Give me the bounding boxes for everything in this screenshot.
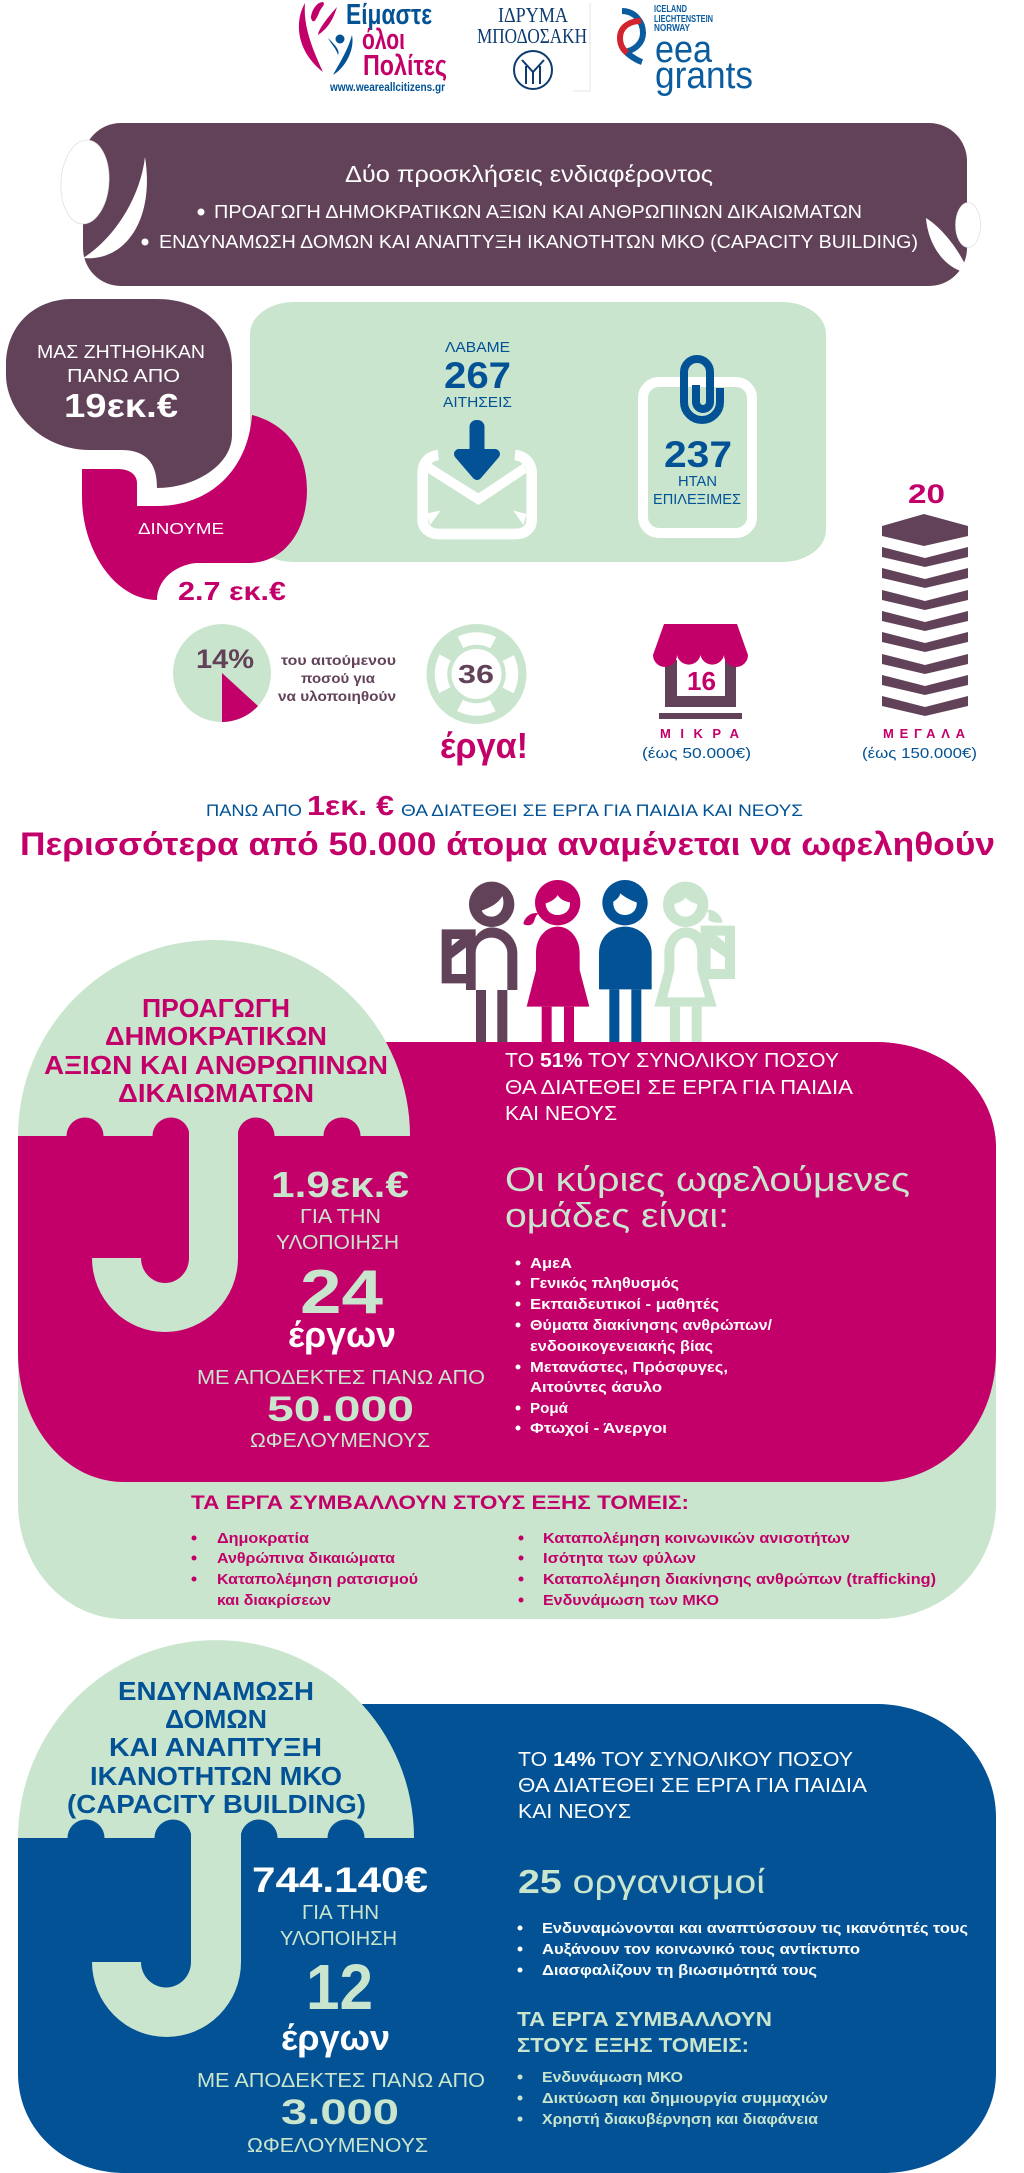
text: share of requested amount: του αιτούμενου: [281, 652, 396, 668]
panel: requested purple bubble: [6, 299, 232, 488]
stat: 237 eligible: ΗΤΑΝ: [678, 473, 717, 490]
panel: democratic values section: [18, 940, 996, 1619]
icon: large projects stack: 20: [908, 479, 945, 509]
list: sectors left column: Δημοκρατία: [217, 1531, 309, 1547]
text: 51 percent for children: [505, 1050, 854, 1125]
stat: 237 eligible: [653, 434, 741, 508]
logo: Είμαστε όλοι Πολίτες: όλοι: [362, 24, 405, 56]
text: over 1 million for children: ΠΑΝΩ ΑΠΟ: [206, 801, 302, 820]
icon: four children figures: [442, 880, 735, 1043]
list: capacity sectors: [518, 2070, 828, 2128]
text: 51 percent for children: ΘΑ ΔΙΑΤΕΘΕΙ ΣΕ ΕΡΓΑ ΓΙΑ ΠΑΙΔΙΑ: [505, 1077, 854, 1099]
icon: small projects shop: 16: [687, 666, 716, 696]
list: beneficiary groups: Γενικός πληθυσμός: [530, 1276, 679, 1292]
heading: sectors: [517, 2009, 772, 2057]
list: sectors left column: [192, 1531, 418, 1609]
stats: budget and projects: ΩΦΕΛΟΥΜΕΝΟΥΣ: [250, 1430, 430, 1452]
logo: EEA grants: LIECHTENSTEIN: [654, 14, 713, 25]
list: beneficiary groups: Εκπαιδευτικοί - μαθητές: [530, 1297, 719, 1313]
logo: EEA grants: [620, 4, 753, 97]
stat: 237 eligible: ΕΠΙΛΕΞΙΜΕΣ: [653, 491, 741, 508]
list: organisation benefits: [518, 1921, 968, 1979]
figure: boy with backpack: [442, 882, 517, 1043]
icon: document with paperclip: [643, 359, 752, 533]
panel: requested purple bubble: ΜΑΣ ΖΗΤΗΘΗΚΑΝ: [37, 341, 205, 362]
list: sectors left column: και διακρίσεων: [217, 1593, 331, 1609]
text: 14 percent for children: ΤΟ 14% ΤΟΥ ΣΥΝΟΛΙΚΟΥ ΠΟΣΟΥ: [518, 1749, 853, 1771]
stats: budget and projects: 24: [300, 1258, 384, 1327]
stats: budget and projects: ΓΙΑ ΤΗΝ: [300, 1206, 381, 1228]
list: sectors right column: [518, 1531, 936, 1609]
heading: promotion of democratic values: ΔΙΚΑΙΩΜΑΤΩΝ: [118, 1078, 314, 1108]
logo: Ίδρυμα Μποδοσάκη: [477, 3, 590, 91]
logo: Είμαστε όλοι Πολίτες: Πολίτες: [363, 50, 447, 82]
text: over 1 million for children: ΘΑ ΔΙΑΤΕΘΕΙ ΣΕ ΕΡΓΑ ΓΙΑ ΠΑΙΔΙΑ ΚΑΙ ΝΕΟΥΣ: [401, 801, 803, 820]
text: 14 percent for children: ΚΑΙ ΝΕΟΥΣ: [518, 1801, 631, 1823]
icon: umbrella: [18, 1640, 414, 2037]
text: share of requested amount: να υλοποιηθούν: [278, 688, 396, 704]
figure: boy in blue: [599, 880, 652, 1043]
panel: two calls banner: Δύο προσκλήσεις ενδιαφέροντος: [345, 161, 713, 187]
stats: budget and projects: 3.000: [281, 2093, 399, 2132]
stats: budget and projects: έργων: [281, 2017, 390, 2058]
stat: 267 applications: ΑΙΤΗΣΕΙΣ: [443, 394, 512, 411]
stats: budget and projects: ΥΛΟΠΟΙΗΣΗ: [280, 1928, 397, 1950]
panel: we give pink bubble: ΔΙΝΟΥΜΕ: [138, 521, 224, 538]
icon: large projects stack: ΜΕΓΑΛΑ: [883, 726, 966, 741]
list: beneficiary groups: ΑμεΑ: [530, 1256, 573, 1272]
text: 51 percent for children: ΤΟ 51% ΤΟΥ ΣΥΝΟΛΙΚΟΥ ΠΟΣΟΥ: [505, 1050, 839, 1072]
icon: envelope with arrow: [423, 420, 532, 534]
heading: 25 organisations: 25 οργανισμοί: [518, 1863, 765, 1900]
icon: lifebuoy with 36 projects: [426, 624, 528, 766]
text: share of requested amount: [278, 652, 396, 704]
list: sectors left column: Ανθρώπινα δικαιώματα: [217, 1551, 395, 1567]
icon: large projects stack: [862, 479, 977, 762]
panel: capacity building section: [18, 1640, 996, 2173]
list: organisation benefits: Διασφαλίζουν τη βιωσιμότητά τους: [542, 1963, 817, 1979]
logo: Ίδρυμα Μποδοσάκη: ΙΔΡΥΜΑ: [498, 3, 569, 27]
icon: small projects shop: [642, 624, 751, 762]
panel: applications green box: [250, 302, 826, 562]
logo: EEA grants: ICELAND: [654, 4, 687, 15]
list: beneficiary groups: Αιτούντες άσυλο: [530, 1380, 662, 1396]
figure: girl with backpack: [654, 882, 735, 1043]
heading: sectors: ΣΤΟΥΣ ΕΞΗΣ ΤΟΜΕΙΣ:: [517, 2035, 749, 2057]
icon: lifebuoy with 36 projects: έργα!: [440, 725, 528, 766]
list: sectors left column: Καταπολέμηση ρατσισμού: [217, 1572, 418, 1588]
stats: budget and projects: [197, 1861, 485, 2157]
list: organisation benefits: Ενδυναμώνονται και αναπτύσσουν τις ικανότητές τους: [542, 1921, 968, 1937]
heading: main beneficiary groups: Οι κύριες ωφελούμενες: [505, 1161, 910, 1199]
stat: 267 applications: ΛΑΒΑΜΕ: [445, 339, 510, 356]
panel: two calls banner: ΕΝΔΥΝΑΜΩΣΗ ΔΟΜΩΝ ΚΑΙ ΑΝΑΠΤΥΞΗ ΙΚΑΝΟΤΗΤΩΝ ΜΚΟ (CAPACITY BUILDING): [159, 231, 918, 252]
icon: large projects stack: (έως 150.000€): [862, 745, 977, 762]
panel: two calls banner: ΠΡΟΑΓΩΓΗ ΔΗΜΟΚΡΑΤΙΚΩΝ ΑΞΙΩΝ ΚΑΙ ΑΝΘΡΩΠΙΝΩΝ ΔΙΚΑΙΩΜΑΤΩΝ: [214, 201, 862, 222]
list: capacity sectors: Δικτύωση και δημιουργία συμμαχιών: [542, 2091, 828, 2107]
heading: capacity building: ΙΚΑΝΟΤΗΤΩΝ ΜΚΟ: [90, 1761, 342, 1791]
panel: requested purple bubble: ΠΑΝΩ ΑΠΟ: [67, 365, 180, 386]
stat: 237 eligible: 237: [664, 434, 732, 475]
heading: capacity building: ΚΑΙ ΑΝΑΠΤΥΞΗ: [109, 1732, 322, 1762]
logo: EEA grants: eea: [655, 29, 713, 71]
stats: budget and projects: ΩΦΕΛΟΥΜΕΝΟΥΣ: [247, 2135, 428, 2157]
chart: 14 percent pie: 14%: [196, 644, 254, 674]
heading: promotion of democratic values: ΑΞΙΩΝ ΚΑΙ ΑΝΘΡΩΠΙΝΩΝ: [44, 1050, 388, 1080]
list: capacity sectors: Ενδυνάμωση ΜΚΟ: [542, 2070, 683, 2086]
heading: sectors: ΤΑ ΕΡΓΑ ΣΥΜΒΑΛΛΟΥΝ: [517, 2009, 772, 2031]
stat: 267 applications: [443, 339, 512, 411]
panel: we give pink bubble: 2.7 εκ.€: [178, 576, 286, 606]
list: sectors right column: Ενδυνάμωση των ΜΚΟ: [543, 1593, 719, 1609]
panel: two calls banner: [58, 123, 981, 286]
list: beneficiary groups: Μετανάστες, Πρόσφυγες,: [530, 1360, 728, 1376]
list: beneficiary groups: ενδοοικογενειακής βίας: [530, 1339, 713, 1355]
heading: promotion of democratic values: ΠΡΟΑΓΩΓΗ: [142, 993, 290, 1023]
heading: more than 50000 beneficiaries: Περισσότερα από 50.000 άτομα αναμένεται να ωφεληθούν: [20, 826, 995, 862]
heading: main beneficiary groups: [505, 1161, 910, 1235]
list: organisation benefits: Αυξάνουν τον κοινωνικό τους αντίκτυπο: [542, 1942, 860, 1958]
stats: budget and projects: 1.9εκ.€: [271, 1164, 409, 1205]
heading: capacity building: [67, 1676, 366, 1819]
chart: 14 percent pie: [173, 624, 271, 722]
stats: budget and projects: ΓΙΑ ΤΗΝ: [302, 1902, 379, 1924]
list: sectors right column: Ισότητα των φύλων: [543, 1551, 696, 1567]
icon: umbrella: [18, 940, 410, 1332]
stats: budget and projects: 12: [306, 1951, 373, 2023]
heading: sectors: ΤΑ ΕΡΓΑ ΣΥΜΒΑΛΛΟΥΝ ΣΤΟΥΣ ΕΞΗΣ ΤΟΜΕΙΣ:: [191, 1492, 689, 1514]
list: sectors right column: Καταπολέμηση κοινωνικών ανισοτήτων: [543, 1531, 850, 1547]
panel: we give pink bubble: [82, 415, 307, 606]
text: over 1 million for children: 1εκ. €: [307, 790, 394, 821]
heading: capacity building: ΔΟΜΩΝ: [165, 1704, 267, 1734]
logo: Είμαστε όλοι Πολίτες: [299, 0, 447, 94]
list: beneficiary groups: Φτωχοί - Άνεργοι: [530, 1421, 667, 1437]
logo: EEA grants: grants: [655, 55, 753, 97]
icon: lifebuoy with 36 projects: 36: [458, 659, 494, 689]
list: beneficiary groups: Ρομά: [530, 1401, 568, 1417]
icon: small projects shop: ΜΙΚΡΑ: [660, 726, 740, 741]
figure: girl in pink dress: [523, 880, 589, 1043]
list: beneficiary groups: [516, 1256, 772, 1437]
heading: capacity building: ΕΝΔΥΝΑΜΩΣΗ: [118, 1676, 314, 1706]
text: over 1 million for children: [206, 790, 803, 821]
text: 14 percent for children: ΘΑ ΔΙΑΤΕΘΕΙ ΣΕ ΕΡΓΑ ΓΙΑ ΠΑΙΔΙΑ: [518, 1775, 868, 1797]
logo: Ίδρυμα Μποδοσάκη: ΜΠΟΔΟΣΑΚΗ: [477, 24, 587, 48]
stats: budget and projects: ΜΕ ΑΠΟΔΕΚΤΕΣ ΠΑΝΩ ΑΠΟ: [197, 1367, 485, 1389]
heading: main beneficiary groups: ομάδες είναι:: [505, 1197, 729, 1235]
panel background: pink main area: [18, 1042, 996, 1482]
icon: small projects shop: (έως 50.000€): [642, 745, 751, 762]
logo: Είμαστε όλοι Πολίτες: www.weareallcitizens.gr: [329, 82, 445, 94]
panel: requested purple bubble: 19εκ.€: [64, 387, 178, 424]
text: 14 percent for children: [518, 1749, 868, 1823]
list: capacity sectors: Χρηστή διακυβέρνηση και διαφάνεια: [542, 2112, 818, 2128]
stat: 267 applications: 267: [444, 355, 511, 396]
heading: promotion of democratic values: ΔΗΜΟΚΡΑΤΙΚΩΝ: [105, 1021, 327, 1051]
stats: budget and projects: ΜΕ ΑΠΟΔΕΚΤΕΣ ΠΑΝΩ ΑΠΟ: [197, 2070, 485, 2092]
stats: budget and projects: ΥΛΟΠΟΙΗΣΗ: [276, 1232, 399, 1254]
panel background: green sectors area: [18, 1136, 996, 1619]
text: share of requested amount: ποσού για: [301, 670, 375, 686]
stats: budget and projects: 744.140€: [252, 1861, 428, 1900]
stats: budget and projects: 50.000: [267, 1390, 414, 1429]
heading: capacity building: (CAPACITY BUILDING): [67, 1789, 366, 1819]
heading: promotion of democratic values: [44, 993, 388, 1108]
text: 51 percent for children: ΚΑΙ ΝΕΟΥΣ: [505, 1103, 617, 1125]
stats: budget and projects: [197, 1164, 485, 1452]
logo: EEA grants: NORWAY: [654, 23, 690, 34]
list: beneficiary groups: Θύματα διακίνησης ανθρώπων/: [530, 1318, 772, 1334]
panel background: blue main area: [18, 1704, 996, 2173]
stats: budget and projects: έργων: [288, 1314, 396, 1355]
list: sectors right column: Καταπολέμηση διακίνησης ανθρώπων (trafficking): [543, 1572, 936, 1588]
